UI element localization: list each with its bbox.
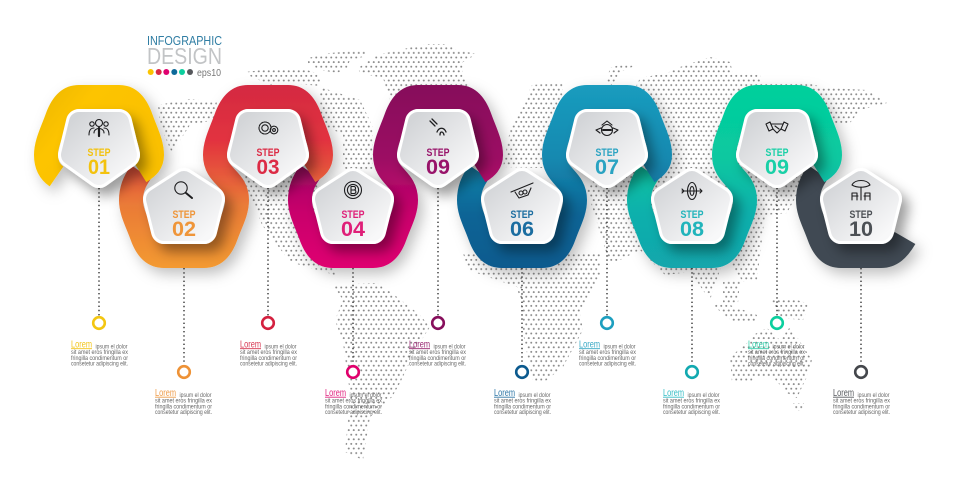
title: infographic: INFOGRAPHIC [147, 33, 222, 48]
note 6: sit amet eros fringilla ex [494, 398, 552, 405]
note 3: ipsum el dolor [264, 344, 296, 350]
map: Greenland [358, 44, 477, 100]
icon: people [89, 120, 109, 136]
ribbon: steps 4-5 [300, 97, 491, 256]
note 10: fringilla condimentum or [833, 404, 890, 410]
note 3: consetetur adipiscing elit. [240, 360, 297, 368]
note 9: fringilla condimentum or [748, 355, 805, 362]
note 9: consetetur adipiscing elit. [748, 360, 805, 368]
map: Africa [463, 253, 600, 383]
ring 3 [262, 317, 274, 329]
ribbon: steps 8-9 [639, 97, 830, 256]
note 2 [155, 388, 213, 416]
ring 2 [178, 366, 190, 378]
note 4: sit amet eros fringilla ex [325, 398, 383, 405]
map: Tasmania [793, 403, 804, 411]
map: Malay islands [710, 303, 757, 323]
map: Australia [730, 327, 812, 398]
pentagon frame [156, 181, 212, 231]
pentagon frame [833, 181, 889, 231]
map: North America [320, 87, 373, 170]
pentagon frame [410, 122, 466, 175]
ribbon: steps 6-7 [469, 97, 660, 256]
step label: STEP [172, 209, 196, 221]
step 2 [156, 181, 212, 241]
map: Alaska [158, 99, 217, 153]
note 6: consetetur adipiscing elit. [494, 409, 551, 416]
note 1: ipsum el dolor [96, 344, 128, 350]
note 1: consetetur adipiscing elit. [71, 360, 128, 368]
step number: 10 [849, 218, 873, 241]
eps label: eps10 [197, 67, 221, 79]
note 6 [494, 388, 552, 416]
ring 7 [601, 317, 613, 329]
pentagon face [410, 122, 466, 175]
step 5 [410, 119, 466, 179]
pentagon face [664, 181, 720, 231]
ring 6 [516, 366, 528, 378]
step 8 [664, 181, 720, 241]
map: South America [327, 283, 430, 460]
note 10: sit amet eros fringilla ex [833, 398, 891, 405]
ring 9 [771, 317, 783, 329]
map: Central America [240, 170, 335, 275]
pentagon face [71, 122, 127, 175]
step number: 09 [426, 156, 450, 179]
step 7 [579, 121, 635, 179]
step 1 [71, 120, 127, 179]
note 7: consetetur adipiscing elit. [579, 360, 636, 368]
title: design: DESIGN [147, 43, 222, 69]
note 8: consetetur adipiscing elit. [663, 409, 720, 416]
note 8 [663, 388, 721, 416]
note 3: sit amet eros fringilla ex [240, 349, 298, 356]
note 1: fringilla condimentum or [71, 355, 128, 362]
connector lines and rings [93, 188, 867, 378]
step number: 02 [172, 218, 196, 241]
note 5: consetetur adipiscing elit. [409, 360, 466, 368]
note 9: Lorem [748, 340, 769, 350]
note 10: consetetur adipiscing elit. [833, 409, 890, 416]
note 4: fringilla condimentum or [325, 404, 382, 410]
ring 8 [686, 366, 698, 378]
step label: STEP [510, 209, 534, 221]
note 5 [409, 340, 467, 368]
pentagon face [325, 181, 381, 231]
ribbon: step 10 [808, 172, 905, 256]
note 4 [325, 388, 383, 416]
title block [147, 33, 222, 79]
map: Arctic islands [245, 68, 320, 86]
step label: STEP [680, 209, 704, 221]
note 2: consetetur adipiscing elit. [155, 409, 212, 416]
pentagon face [240, 122, 296, 175]
step number: 01 [88, 156, 110, 179]
step label: STEP [426, 147, 450, 159]
step label: STEP [596, 147, 618, 159]
note 1: sit amet eros fringilla ex [71, 349, 129, 356]
note 8: fringilla condimentum or [663, 404, 720, 410]
step 4 [325, 181, 381, 241]
map: Asia [587, 57, 887, 300]
note 7: ipsum el dolor [604, 344, 636, 350]
step number: 03 [256, 156, 280, 179]
map: Indonesia [770, 298, 810, 320]
pentagon face [494, 181, 550, 231]
pentagon frame [71, 122, 127, 175]
pentagon frame [494, 181, 550, 231]
step 6 [494, 181, 550, 241]
note 4: ipsum el dolor [350, 392, 382, 399]
map: Canada north [308, 50, 367, 73]
step label: STEP [850, 209, 872, 221]
note 7: sit amet eros fringilla ex [579, 349, 637, 356]
icon: umbrella and tables [852, 180, 870, 200]
note 5: ipsum el dolor [434, 344, 466, 350]
icon: hands [511, 183, 533, 198]
step number: 07 [595, 156, 619, 179]
note 9 [748, 340, 806, 368]
note 7: fringilla condimentum or [579, 355, 636, 362]
note 9: ipsum el dolor [772, 344, 804, 350]
note 9: sit amet eros fringilla ex [748, 349, 806, 356]
icon: magnifier [175, 182, 192, 198]
note 2: sit amet eros fringilla ex [155, 398, 213, 405]
note 2: ipsum el dolor [180, 392, 212, 399]
note 6: Lorem [494, 388, 515, 399]
pentagon frame [664, 181, 720, 231]
step number: 06 [510, 218, 534, 241]
note 2: Lorem [155, 388, 176, 399]
note 10: Lorem [833, 388, 854, 399]
step label: STEP [256, 147, 280, 159]
pentagon face [579, 122, 635, 175]
step 9 [749, 122, 805, 179]
note 8: ipsum el dolor [688, 392, 720, 399]
note 7: Lorem [579, 340, 600, 350]
note 5: sit amet eros fringilla ex [409, 349, 467, 356]
pentagon frame [325, 181, 381, 231]
icon: winged emblem [596, 121, 618, 136]
pentagon face [833, 181, 889, 231]
note 7 [579, 340, 637, 368]
ring 1 [93, 317, 105, 329]
note 10: ipsum el dolor [858, 392, 890, 399]
pentagon frame [749, 122, 805, 175]
note 6: ipsum el dolor [518, 392, 550, 399]
note 8: Lorem [663, 388, 684, 399]
icon: target [682, 182, 702, 200]
ring 5 [432, 317, 444, 329]
icon: gears [259, 122, 278, 134]
ribbon: step 1 [46, 97, 152, 176]
note 3 [240, 340, 298, 368]
note 1: Lorem [71, 340, 92, 350]
step number: 04 [341, 218, 365, 241]
pentagon face [749, 122, 805, 175]
note 3: fringilla condimentum or [240, 355, 297, 362]
step 10 [833, 180, 889, 241]
note 8: sit amet eros fringilla ex [663, 398, 721, 405]
icon: coin [344, 182, 362, 198]
step number: 09 [765, 156, 789, 179]
map: Europe [503, 83, 563, 168]
step label: STEP [88, 147, 110, 159]
icon: chain link [430, 119, 446, 135]
note 5: Lorem [409, 340, 430, 350]
step number: 08 [680, 218, 704, 241]
note 5: fringilla condimentum or [409, 355, 466, 362]
map: Scandinavia [606, 63, 637, 85]
background: dotted world map [158, 44, 887, 460]
pentagon face [156, 181, 212, 231]
step 3 [240, 122, 296, 179]
pentagon frame [240, 122, 296, 175]
note 2: fringilla condimentum or [155, 404, 212, 410]
note 4: Lorem [325, 388, 346, 399]
pentagon frame [579, 122, 635, 175]
ring 4 [347, 366, 359, 378]
step label: STEP [342, 209, 364, 221]
icon: handshake [766, 122, 788, 133]
note 1 [71, 340, 129, 368]
step label: STEP [766, 147, 788, 159]
note 6: fringilla condimentum or [494, 404, 551, 410]
ribbon: steps 2-3 [131, 97, 321, 256]
note 10 [833, 388, 891, 416]
note 4: consetetur adipiscing elit. [325, 409, 382, 416]
colour dots [148, 69, 193, 75]
ring 10 [855, 366, 867, 378]
map: South-East Asia [723, 280, 740, 303]
note 3: Lorem [240, 340, 261, 350]
ribbon [46, 97, 905, 256]
